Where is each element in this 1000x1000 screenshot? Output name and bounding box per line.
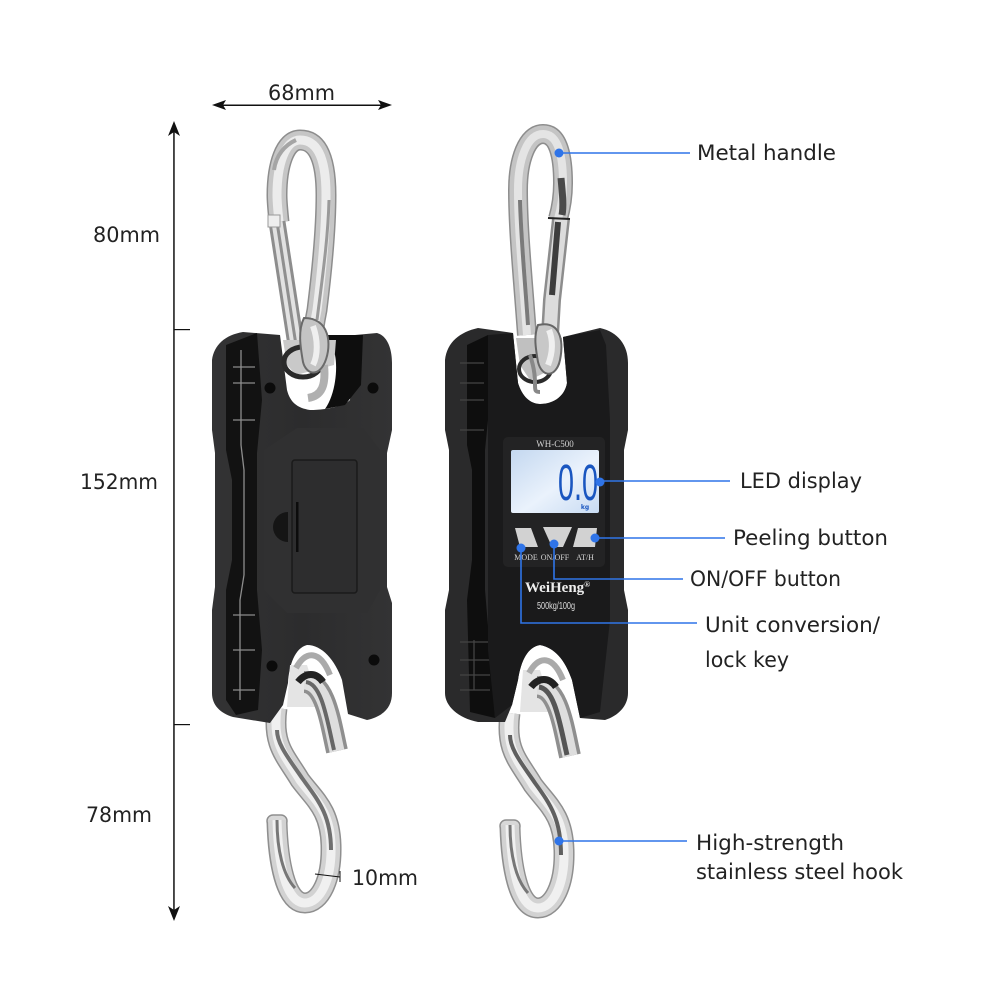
button labels bbox=[514, 553, 594, 562]
battery latch bbox=[273, 502, 298, 552]
dimension labels: 68mm bbox=[268, 81, 335, 105]
callout: on/off button: ON/OFF button bbox=[690, 567, 841, 591]
right hook: carabiner with metal handle, front view bbox=[518, 134, 570, 335]
buttons bbox=[515, 527, 597, 547]
left top ring and carabiner base bbox=[283, 318, 336, 398]
hook thickness marker bbox=[315, 871, 340, 882]
callout: stainless steel hook: High-strength bbox=[696, 831, 844, 855]
capacity: 500kg/100g bbox=[537, 601, 575, 612]
LCD screen bbox=[511, 450, 599, 513]
left S hook upper arm and plate bbox=[287, 655, 337, 751]
callout: stainless steel hook bbox=[554, 831, 904, 884]
callout: peeling button: Peeling button bbox=[733, 526, 888, 550]
width dimension arrow bbox=[212, 100, 392, 110]
button labels: AT/H bbox=[576, 553, 594, 562]
button labels: ON/OFF bbox=[541, 553, 570, 562]
battery cover bbox=[292, 460, 357, 593]
brand: WeiHeng bbox=[525, 580, 584, 596]
callout: peeling button bbox=[590, 526, 888, 550]
callout: unit conversion / lock key: lock key bbox=[705, 648, 789, 672]
callout: stainless steel hook: stainless steel hook bbox=[696, 860, 904, 884]
callout: LED display bbox=[596, 469, 862, 493]
dimension labels: 80mm bbox=[93, 223, 160, 247]
left hook: carabiner, back view bbox=[268, 140, 329, 345]
right scale body, front view bbox=[445, 328, 628, 722]
button labels: MODE bbox=[514, 553, 538, 562]
LCD unit: kg bbox=[581, 504, 589, 511]
display panel bbox=[503, 437, 605, 567]
LCD reading: 0.0 bbox=[558, 454, 598, 511]
left S hook lower part bbox=[267, 708, 331, 903]
right S hook upper arm and plate bbox=[520, 660, 570, 756]
callout: metal handle: Metal handle bbox=[697, 141, 836, 165]
screws bbox=[264, 382, 380, 672]
right top ring and carabiner base bbox=[516, 324, 562, 392]
dimension labels: 78mm bbox=[86, 803, 152, 827]
height dimension arrow bbox=[168, 121, 190, 921]
dimension labels: 10mm bbox=[352, 866, 418, 890]
brand: ® bbox=[584, 580, 590, 589]
model label: WH-C500 bbox=[536, 439, 574, 449]
left scale body, back view bbox=[212, 332, 392, 723]
callout: on/off button bbox=[550, 540, 841, 591]
callout: LED display: LED display bbox=[740, 469, 862, 493]
callout: metal handle bbox=[554, 141, 836, 165]
callout: unit conversion / lock key bbox=[516, 544, 881, 672]
dimension labels bbox=[80, 81, 418, 890]
right S hook lower part bbox=[500, 713, 564, 908]
callout: unit conversion / lock key: Unit conversion/ bbox=[705, 613, 881, 637]
dimension labels: 152mm bbox=[80, 470, 158, 494]
